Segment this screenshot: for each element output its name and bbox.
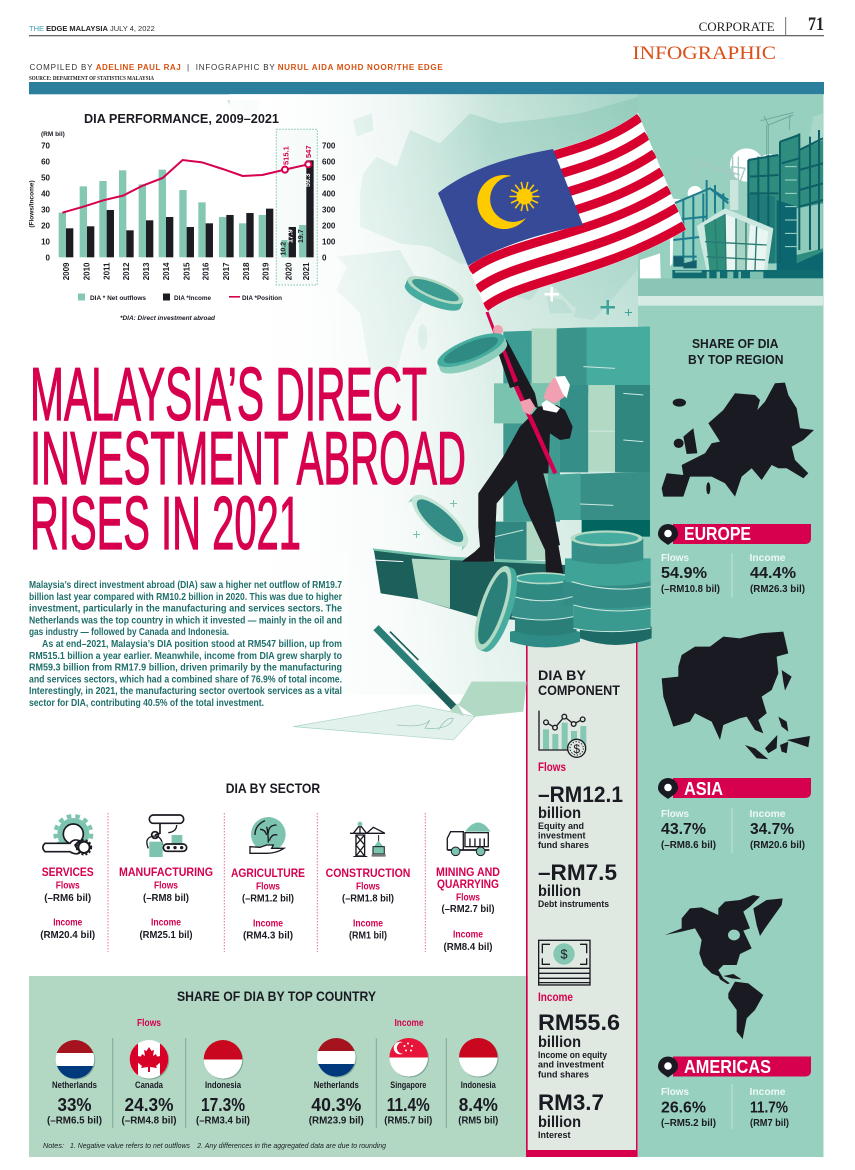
figures: Asia: Flows — [661, 808, 689, 820]
income countries figures: (RM5.7 bil) — [384, 1114, 432, 1126]
bars — [59, 160, 314, 257]
sector: construction: Income — [353, 918, 383, 930]
income figures: Income — [538, 990, 573, 1004]
sector: mining and quarrying: Flows — [456, 892, 480, 904]
year labels: 2009 — [62, 262, 71, 280]
income figures: RM3.7 — [538, 1090, 604, 1115]
income figures: Interest — [538, 1130, 571, 1140]
flows countries figures: (–RM6.5 bil) — [47, 1114, 102, 1126]
intro text: gas industry — followed by Canada and Indonesia. — [29, 627, 229, 638]
income countries figures: Indonesia — [461, 1080, 497, 1090]
year labels: 2012 — [122, 262, 131, 280]
body — [462, 405, 573, 562]
figures: Americas: (–RM5.2 bil) — [661, 1118, 716, 1129]
heading: share of DIA by top region — [688, 336, 784, 367]
credits: COMPILED BY — [30, 63, 93, 72]
chart: DIA performance 2009-2021: (RM bil) — [41, 131, 65, 138]
income figures: and investment — [538, 1060, 604, 1070]
income bars — [66, 160, 314, 257]
income countries figures: 40.3% — [311, 1095, 361, 1115]
main title — [30, 353, 466, 566]
figures: Asia: Income — [750, 808, 786, 820]
flag: Singapore — [389, 1038, 430, 1078]
sector: construction: CONSTRUCTION — [326, 868, 410, 880]
label: flows: Flows — [137, 1017, 161, 1029]
map: Asia — [662, 632, 810, 759]
notes: 1. Negative value refers to net outflows — [70, 1141, 190, 1150]
flows countries figures: Netherlands — [52, 1080, 97, 1090]
left axis labels: 0 — [46, 253, 51, 262]
flag: Indonesia — [203, 1040, 243, 1080]
sector: agriculture: Flows — [256, 880, 280, 892]
year labels: 2011 — [102, 262, 112, 280]
year labels — [62, 262, 311, 280]
sector: services: (RM20.4 bil) — [40, 929, 95, 941]
sector: mining and quarrying: (–RM2.7 bil) — [442, 903, 494, 915]
figures: Europe: (–RM10.8 bil) — [661, 584, 720, 595]
sparkles — [413, 287, 632, 538]
income figures: billion — [538, 1114, 581, 1131]
axis title: (Flows/Income) — [28, 180, 36, 228]
label: Asia: ASIA — [684, 779, 723, 799]
heading: DIA by component — [538, 667, 620, 698]
intro text: RM515.1 billion a year earlier. Meanwhile, income from DIA grew sharply to — [29, 651, 342, 662]
flows countries figures: 33% — [58, 1095, 92, 1115]
city skyline illustration — [638, 113, 824, 306]
sector: construction — [326, 868, 410, 942]
sector: manufacturing — [119, 867, 213, 941]
sector: agriculture: Income — [253, 918, 283, 930]
building base — [672, 270, 824, 278]
chart: DIA performance 2009-2021 — [28, 112, 336, 322]
icon: bar chart with coin: $ — [573, 742, 580, 756]
sector: agriculture — [231, 868, 305, 942]
label: Europe: EUROPE — [684, 524, 751, 544]
flows countries figures — [47, 1080, 250, 1126]
illustration: man on money with Malaysian flag — [293, 113, 686, 740]
flows figures: billion — [538, 883, 581, 900]
year labels: 2020 — [284, 262, 294, 280]
label: Europe — [658, 524, 811, 545]
figures: Americas: (RM7 bil) — [750, 1118, 789, 1129]
data labels: 547 — [304, 145, 313, 158]
heading: share of DIA by top region: SHARE OF DIA — [692, 336, 779, 351]
income countries figures: (RM5 bil) — [458, 1114, 498, 1126]
intro text — [29, 580, 343, 709]
flows countries figures: (–RM4.8 bil) — [122, 1114, 176, 1126]
heading: DIA by component: DIA BY — [538, 667, 587, 683]
icon: mining truck — [447, 822, 491, 856]
flying coin 2 — [433, 326, 511, 380]
legend — [78, 294, 282, 302]
intro text: and services sectors, which had a combined share of 76.9% of total income. — [29, 674, 342, 685]
sector: services — [40, 867, 95, 941]
right axis labels: 600 — [322, 157, 336, 166]
left glass building — [672, 188, 728, 268]
legend: DIA *Income — [174, 295, 211, 302]
income countries figures: 8.4% — [459, 1095, 498, 1115]
sector: agriculture: (–RM1.2 bil) — [242, 892, 294, 904]
right axis labels — [322, 141, 336, 262]
sector: mining and quarrying — [436, 867, 500, 953]
flying coin 3 — [405, 487, 475, 555]
year labels: 2014 — [162, 262, 171, 280]
income figures: RM55.6 — [538, 1010, 620, 1035]
left axis labels: 30 — [41, 205, 51, 214]
right axis labels: 100 — [322, 237, 336, 246]
data labels: 10.2 — [280, 242, 288, 256]
notes: Notes: — [43, 1141, 64, 1150]
figures: Europe: Income — [750, 552, 786, 564]
heading: share of DIA by top country: SHARE OF DIA BY TOP COUNTRY — [177, 988, 377, 1004]
panel: DIA by sector — [40, 780, 500, 953]
flows countries figures: 17.3% — [201, 1095, 245, 1115]
intro text: RM59.3 billion from RM17.9 billion, driven primarily by the manufacturing — [29, 663, 342, 674]
label: Americas: AMERICAS — [684, 1057, 771, 1077]
sector: manufacturing: Flows — [154, 880, 178, 892]
flows countries figures: Indonesia — [205, 1080, 242, 1090]
sector: mining and quarrying: MINING AND — [436, 867, 500, 879]
flying coin 1 — [402, 271, 467, 316]
intro text: Interestingly, in 2021, the manufacturing sector overtook services as a vital — [29, 686, 342, 697]
flying coin 4 — [467, 562, 525, 656]
heading: DIA by sector: DIA BY SECTOR — [226, 780, 320, 796]
right axis labels: 200 — [322, 221, 336, 230]
hand on pole — [493, 325, 503, 335]
figures: Americas: 26.6% — [661, 1100, 706, 1116]
credits: | — [187, 63, 189, 72]
intro text: Netherlands was the top country in which it invested — mainly in the oil and — [29, 615, 342, 626]
left axis labels: 10 — [41, 237, 51, 246]
highlight box 2020-2021 — [276, 129, 317, 285]
figures: Americas: Flows — [661, 1086, 689, 1098]
left axis labels: 60 — [41, 157, 51, 166]
year labels: 2010 — [82, 262, 92, 280]
sector: mining and quarrying: QUARRYING — [437, 879, 499, 891]
right axis labels: 400 — [322, 189, 336, 198]
icon: bar chart with coin — [539, 711, 586, 757]
sector: services: (–RM6 bil) — [44, 892, 91, 904]
main title: MALAYSIA’S DIRECT — [30, 353, 427, 437]
figures: Europe: (RM26.3 bil) — [750, 584, 805, 595]
flows figures: fund shares — [538, 840, 589, 850]
sector: agriculture: AGRICULTURE — [231, 868, 305, 880]
left axis labels: 40 — [41, 189, 51, 198]
Malaysian flag — [438, 113, 686, 312]
icon: services gears — [43, 816, 91, 855]
icon: manufacturing — [147, 815, 187, 857]
sector: manufacturing: (RM25.1 bil) — [140, 929, 192, 941]
label: income: Income — [394, 1017, 424, 1029]
icon: agriculture — [250, 817, 286, 853]
heading: DIA by component: COMPONENT — [538, 682, 620, 698]
panel: share of DIA by top country — [29, 976, 528, 1157]
right axis labels: 700 — [322, 141, 336, 150]
sector: agriculture: (RM4.3 bil) — [243, 930, 293, 942]
income countries figures: (RM23.9 bil) — [309, 1114, 364, 1126]
flag: Netherlands — [55, 1040, 95, 1080]
region: Americas — [658, 1056, 811, 1129]
sector: construction: Flows — [356, 880, 380, 892]
teal bar — [29, 82, 824, 94]
map: Europe — [662, 383, 814, 497]
flows figures: –RM7.5 — [538, 860, 617, 885]
year labels: 2015 — [182, 262, 192, 280]
credits: INFOGRAPHIC BY — [196, 63, 275, 72]
data labels: 19.7 — [298, 229, 305, 243]
section name: CORPORATE — [699, 19, 775, 34]
legend: DIA *Position — [242, 295, 282, 302]
icon: construction — [350, 822, 386, 857]
figures: Asia — [661, 808, 805, 853]
figures: Europe — [661, 552, 805, 598]
flows figures: Debt instruments — [538, 899, 609, 909]
right axis labels: 500 — [322, 173, 336, 182]
figures: Europe: 44.4% — [750, 565, 796, 582]
figures: Asia: 34.7% — [750, 821, 794, 838]
flows figures — [538, 760, 623, 909]
intro text: sector for DIA, contributing 40.5% of the total investment. — [29, 698, 264, 709]
year labels: 2021 — [302, 262, 311, 280]
chart footnote: *DIA: Direct investment abroad — [120, 315, 216, 322]
year labels: 2019 — [262, 262, 270, 280]
net outflow bars — [59, 170, 306, 257]
income countries figures — [309, 1080, 498, 1126]
right tower — [748, 133, 823, 263]
left axis labels: 20 — [41, 221, 51, 230]
cranes — [760, 112, 794, 156]
red stripes — [440, 118, 684, 307]
crescent — [477, 175, 526, 229]
white clouds — [730, 148, 763, 182]
figures: Asia: (–RM8.6 bil) — [661, 840, 716, 851]
figures: Americas — [661, 1084, 789, 1129]
hand, face and hair — [520, 398, 535, 415]
year labels: 2017 — [222, 262, 231, 280]
data labels: 17.9 — [288, 229, 294, 243]
legend: DIA * Net outflows — [90, 295, 146, 302]
middle building — [697, 208, 773, 270]
flows figures: billion — [538, 805, 581, 822]
flows figures: Equity and — [538, 821, 584, 831]
figures: Europe: 54.9% — [661, 565, 707, 582]
arm — [497, 340, 538, 408]
sector: mining and quarrying: (RM8.4 bil) — [444, 941, 492, 953]
sector: construction: (RM1 bil) — [349, 930, 387, 942]
sector: services: SERVICES — [42, 867, 94, 879]
sector: services: Flows — [56, 880, 80, 892]
intro text: investment, particularly in the manufacturing and services sectors. The — [29, 604, 343, 615]
panel: DIA by component — [526, 640, 638, 1157]
heading: share of DIA by top region: BY TOP REGION — [688, 352, 784, 367]
region: Europe — [658, 524, 811, 598]
intro text: billion last year compared with RM10.2 billion in 2020. This was due to higher — [29, 592, 342, 603]
income figures — [538, 990, 620, 1140]
left axis labels — [41, 141, 51, 262]
income figures: billion — [538, 1034, 581, 1051]
left axis labels: 70 — [41, 141, 51, 150]
page number: 71 — [808, 14, 824, 35]
background world map gradient — [227, 94, 640, 694]
credits: NURUL AIDA MOHD NOOR/THE EDGE — [278, 63, 443, 72]
flows figures: –RM12.1 — [538, 782, 623, 807]
income figures: fund shares — [538, 1070, 589, 1080]
sector: manufacturing: (–RM8 bil) — [143, 892, 189, 904]
icon: banknotes — [539, 940, 590, 985]
notes: 2. Any differences in the aggregated data are due to rounding — [196, 1141, 387, 1150]
sector: manufacturing: MANUFACTURING — [119, 867, 213, 879]
intro text: As at end–2021, Malaysia’s DIA position stood at RM547 billion, up from — [42, 639, 342, 650]
sun — [510, 182, 540, 211]
year labels: 2016 — [202, 262, 210, 280]
label: Americas — [658, 1056, 811, 1078]
figures: Europe: Flows — [661, 552, 689, 564]
panel: share of DIA by top region — [638, 94, 824, 1157]
flows countries figures: 24.3% — [124, 1095, 174, 1115]
figures: Americas: 11.7% — [750, 1100, 788, 1116]
figures: Americas: Income — [750, 1086, 786, 1098]
data labels: 515.1 — [282, 146, 290, 165]
data labels — [280, 145, 313, 256]
flows figures: investment — [538, 830, 586, 840]
sector: manufacturing: Income — [151, 916, 181, 928]
money stacks — [373, 327, 650, 620]
right axis labels: 0 — [322, 253, 327, 262]
main title: RISES IN 2021 — [30, 482, 301, 566]
infographic label: INFOGRAPHIC — [632, 43, 776, 64]
year labels: 2013 — [142, 262, 151, 280]
map: Americas — [665, 895, 783, 1039]
main title: INVESTMENT ABROAD — [30, 417, 466, 501]
income countries figures: Netherlands — [314, 1080, 359, 1090]
income countries figures: Singapore — [390, 1080, 426, 1090]
flows countries figures: Canada — [135, 1080, 164, 1090]
region: Asia — [658, 778, 811, 853]
pole — [502, 358, 557, 474]
credits: ADELINE PAUL RAJ — [96, 63, 181, 72]
figures: Asia: 43.7% — [661, 821, 706, 838]
year labels: 2018 — [242, 262, 251, 280]
flows figures: Flows — [538, 760, 566, 774]
left axis labels: 50 — [41, 173, 51, 182]
flag: Canada — [129, 1040, 169, 1080]
flagpole top — [487, 312, 506, 362]
flag: Netherlands — [316, 1038, 357, 1078]
sector: construction: (–RM1.8 bil) — [342, 892, 394, 904]
flows countries figures: (–RM3.4 bil) — [196, 1114, 250, 1126]
world map land — [227, 97, 640, 370]
flag: Indonesia — [458, 1038, 499, 1078]
right axis labels: 300 — [322, 205, 336, 214]
coin stacks — [510, 530, 652, 647]
icon: banknotes: $ — [560, 948, 568, 962]
position line — [62, 160, 308, 213]
label: Asia — [658, 778, 811, 799]
figures: Asia: (RM20.6 bil) — [750, 840, 805, 851]
source: SOURCE: DEPARTMENT OF STATISTICS MALAYSIA — [29, 76, 155, 82]
page header — [29, 14, 824, 94]
chart title: DIA PERFORMANCE, 2009–2021 — [84, 112, 279, 126]
paper and pen — [293, 628, 527, 740]
income countries figures: 11.4% — [387, 1095, 430, 1115]
masthead: The Edge Malaysia date: THE EDGE MALAYSIA JULY 4, 2022 — [29, 24, 155, 33]
blue canton — [438, 149, 583, 266]
income figures: Income on equity — [538, 1050, 607, 1060]
man figure — [462, 340, 573, 580]
sector: mining and quarrying: Income — [453, 928, 483, 940]
data labels: 59.3 — [305, 173, 312, 187]
sector: services: Income — [53, 916, 82, 928]
intro text: Malaysia’s direct investment abroad (DIA) saw a higher net outflow of RM19.7 — [29, 580, 342, 591]
